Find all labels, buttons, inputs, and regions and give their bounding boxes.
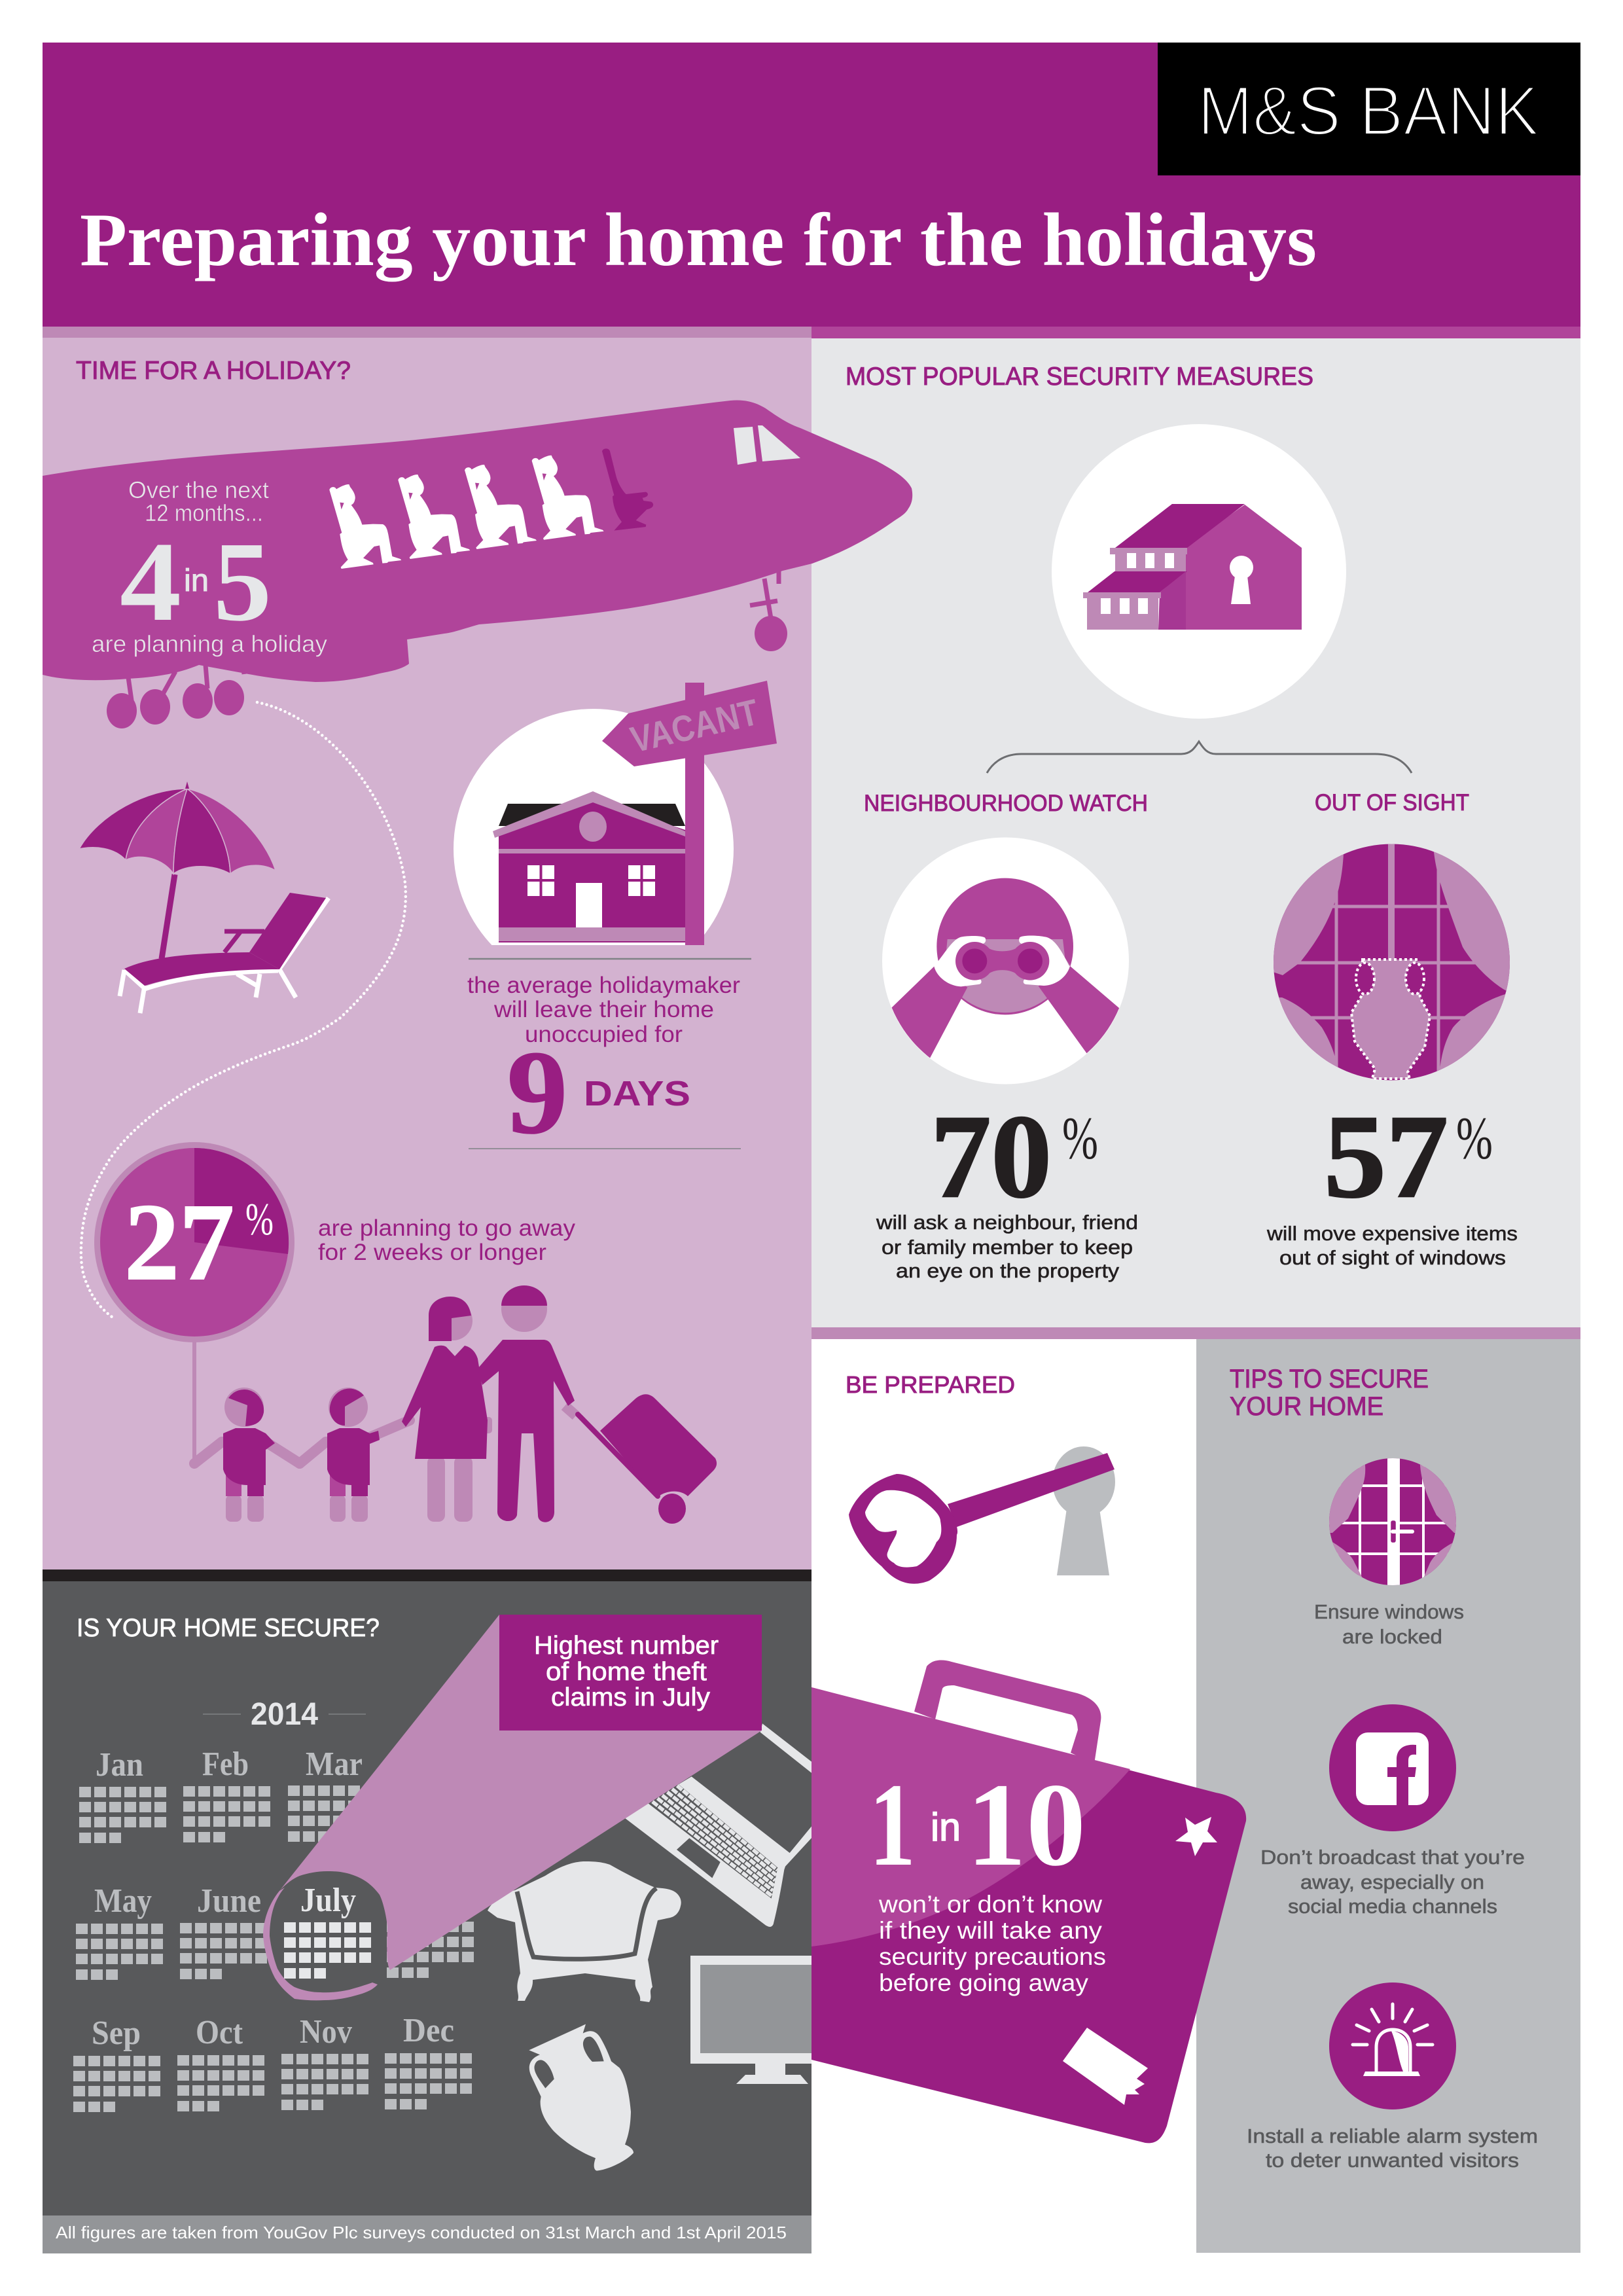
- heading: be prepared: BE PREPARED: [846, 1371, 1015, 1398]
- text: average holidaymaker: [467, 973, 740, 1047]
- icon: heart key: [849, 1453, 1115, 1584]
- calendar month labels: Sep: [92, 2015, 141, 2052]
- text: average holidaymaker: unoccupied for: [525, 1022, 683, 1047]
- calendar year: 2014: [251, 1697, 318, 1732]
- text: ensure windows are locked: Ensure windows: [1314, 1600, 1464, 1623]
- stat: 57%: %: [1456, 1105, 1493, 1172]
- text: out of sight description: out of sight of windows: [1279, 1246, 1506, 1269]
- stat: 9 days: 9: [507, 1027, 567, 1158]
- black divider bar: [43, 1570, 812, 1581]
- text: install alarm: [1247, 2125, 1538, 2172]
- text: average holidaymaker: will leave their home: [493, 997, 714, 1022]
- calendar month labels: Nov: [300, 2013, 352, 2051]
- stat: 70%: 70: [931, 1091, 1052, 1223]
- suitcase handle: [914, 1660, 1101, 1764]
- icon: vacant house: [454, 681, 777, 945]
- stat: 9 days: [507, 1027, 690, 1158]
- calendar month labels: Dec: [403, 2012, 454, 2049]
- suitcase light sheen: [812, 1687, 1130, 1946]
- armchair: [488, 1861, 681, 2002]
- calendar month labels: Jan: [96, 1746, 143, 1784]
- text: install alarm: Install a reliable alarm system: [1247, 2125, 1538, 2147]
- logo: M&S Bank: [1158, 43, 1580, 175]
- heading: tips to secure your home: [1230, 1365, 1429, 1421]
- dotted route: [81, 702, 406, 1317]
- panel: time for a holiday: [43, 338, 912, 1570]
- callout: highest number of claims: of home theft: [546, 1658, 707, 1686]
- pie chart balloon: 27%: [94, 1142, 294, 1460]
- suitcase with 1 in 10 stat: [812, 1660, 1246, 2143]
- heading: time for a holiday: TIME FOR A HOLIDAY?: [76, 357, 351, 385]
- July label and grid: [284, 1882, 371, 1979]
- panel: is your home secure: [43, 1581, 818, 2253]
- text: out of sight description: [1266, 1222, 1518, 1269]
- signpost: vacant: VACANT: [627, 691, 762, 761]
- laptop: [624, 1723, 818, 1927]
- cockpit windows: [734, 425, 800, 465]
- panel: be prepared: [812, 1327, 1580, 2143]
- calendar month labels: Mar: [306, 1746, 363, 1783]
- text: 2 weeks or longer: [318, 1215, 576, 1265]
- stat: 57%: 57: [1324, 1091, 1448, 1223]
- divider top: [469, 958, 751, 960]
- text: don't broadcast: social media channels: [1288, 1895, 1497, 1918]
- pie chart balloon: 27%: %: [245, 1194, 274, 1245]
- July label and grid: July: [300, 1882, 356, 1919]
- pie chart balloon: 27%: 27: [124, 1181, 234, 1303]
- calendar month labels: [92, 1746, 454, 2052]
- spotlight beam from July: [263, 1615, 762, 2000]
- stat: 9 days: DAYS: [584, 1074, 690, 1113]
- child two: [300, 1388, 410, 1522]
- text: neighbour description: an eye on the property: [896, 1259, 1120, 1282]
- monitor: [690, 1956, 812, 2084]
- footer source note: [43, 2215, 812, 2253]
- panel: most popular security measures: [812, 338, 1580, 1327]
- text: are planning a holiday: are planning a holiday: [92, 630, 327, 657]
- callout: highest number of claims: [499, 1615, 762, 1731]
- stat: 1 in 10: [869, 1759, 1086, 1891]
- text: won't or don't know: [878, 1891, 1106, 1996]
- band above be prepared: [812, 1327, 1580, 1339]
- stat: 1 in 10: 10: [967, 1759, 1086, 1891]
- text: 2 weeks or longer: for 2 weeks or longer: [318, 1240, 546, 1265]
- logo: M&S Bank: M&S BANK: [1198, 71, 1539, 150]
- heading: is your home secure: IS YOUR HOME SECURE?: [77, 1614, 380, 1642]
- text: install alarm: to deter unwanted visitors: [1266, 2149, 1519, 2172]
- icon: alarm: [1329, 1982, 1456, 2109]
- text: don't broadcast: Don’t broadcast that you’re: [1260, 1846, 1525, 1869]
- stat: 4 in 5: 4: [120, 518, 181, 645]
- heading: most popular security measures: MOST POPULAR SECURITY MEASURES: [846, 363, 1313, 391]
- signpost: vacant: [602, 681, 777, 945]
- brace connector: [987, 742, 1412, 773]
- icon: house in circle: [1052, 424, 1346, 719]
- landing gear: [107, 571, 787, 728]
- stat: 4 in 5: 5: [213, 518, 272, 645]
- woman: [402, 1297, 492, 1522]
- heading: out of sight: OUT OF SIGHT: [1315, 790, 1469, 816]
- text: ensure windows are locked: are locked: [1342, 1625, 1442, 1648]
- stat: 4 in 5: [120, 518, 272, 645]
- text: neighbour description: will ask a neighbour, friend: [876, 1211, 1138, 1234]
- icon: window with vase and curtains: [1274, 844, 1510, 1080]
- text: don't broadcast: away, especially on: [1300, 1871, 1484, 1893]
- icon: luggage tag: [1063, 2028, 1148, 2105]
- stat: 4 in 5: in: [184, 564, 209, 598]
- airplane illustration: [43, 401, 912, 728]
- footer source note: All figures are taken from YouGov Plc surveys conducted on 31st March and 1st April 2015: [56, 2223, 787, 2242]
- band under header: right: [812, 327, 1580, 338]
- band under header: left: [43, 327, 812, 338]
- calendar month grids: [73, 1785, 474, 2112]
- man: [478, 1285, 576, 1522]
- passengers: [329, 456, 604, 569]
- calendar month labels: Feb: [202, 1746, 249, 1783]
- heading: tips to secure your home: YOUR HOME: [1230, 1392, 1383, 1421]
- heading: tips to secure your home: TIPS TO SECURE: [1230, 1365, 1429, 1393]
- text: over the next 12 months: 12 months...: [145, 499, 263, 526]
- text: won't or don't know: security precautions: [879, 1943, 1106, 1970]
- calendar month labels: Oct: [196, 2014, 243, 2051]
- vase: [529, 2024, 633, 2171]
- stat: 1 in 10: in: [931, 1805, 961, 1849]
- icon: star sticker: [1175, 1817, 1217, 1856]
- text: average holidaymaker: the average holidaymaker: [467, 973, 740, 998]
- calendar month labels: May: [94, 1882, 152, 1920]
- text: ensure windows are locked: [1314, 1600, 1464, 1648]
- text: over the next 12 months: [128, 476, 269, 526]
- family illustration: [194, 1285, 717, 1524]
- text: won't or don't know: if they will take any: [879, 1917, 1103, 1944]
- header banner: [43, 43, 1580, 327]
- text: over the next 12 months: Over the next: [128, 476, 269, 503]
- icon: person with binoculars: [882, 838, 1132, 1084]
- divider bottom: [469, 1148, 741, 1149]
- icon: keyhole: [1052, 1446, 1115, 1575]
- text: neighbour description: or family member to keep: [882, 1236, 1133, 1259]
- title: Preparing your home for the holidays: [80, 198, 1317, 282]
- callout: highest number of claims: claims in July: [551, 1683, 711, 1712]
- text: won't or don't know: won’t or don’t know: [878, 1891, 1102, 1918]
- text: 2 weeks or longer: are planning to go away: [318, 1215, 576, 1241]
- icon: facebook: [1329, 1704, 1456, 1831]
- heading: neighbourhood watch: NEIGHBOURHOOD WATCH: [864, 791, 1148, 816]
- child one: [194, 1388, 300, 1522]
- icon: locked window: [1329, 1458, 1456, 1585]
- calendar month labels: June: [197, 1882, 261, 1920]
- text: neighbour description: [876, 1211, 1138, 1282]
- text: don't broadcast: [1260, 1846, 1525, 1918]
- stat: 70%: %: [1062, 1105, 1098, 1172]
- icon: parasol and sun lounger: [79, 781, 329, 1013]
- panel: tips to secure your home: [1196, 1339, 1580, 2253]
- callout: highest number of claims: Highest number: [534, 1632, 719, 1660]
- empty seat: [602, 448, 653, 531]
- text: won't or don't know: before going away: [879, 1969, 1089, 1996]
- text: out of sight description: will move expensive items: [1266, 1222, 1518, 1245]
- stat: 1 in 10: 1: [869, 1759, 916, 1891]
- suitcase: [578, 1394, 717, 1524]
